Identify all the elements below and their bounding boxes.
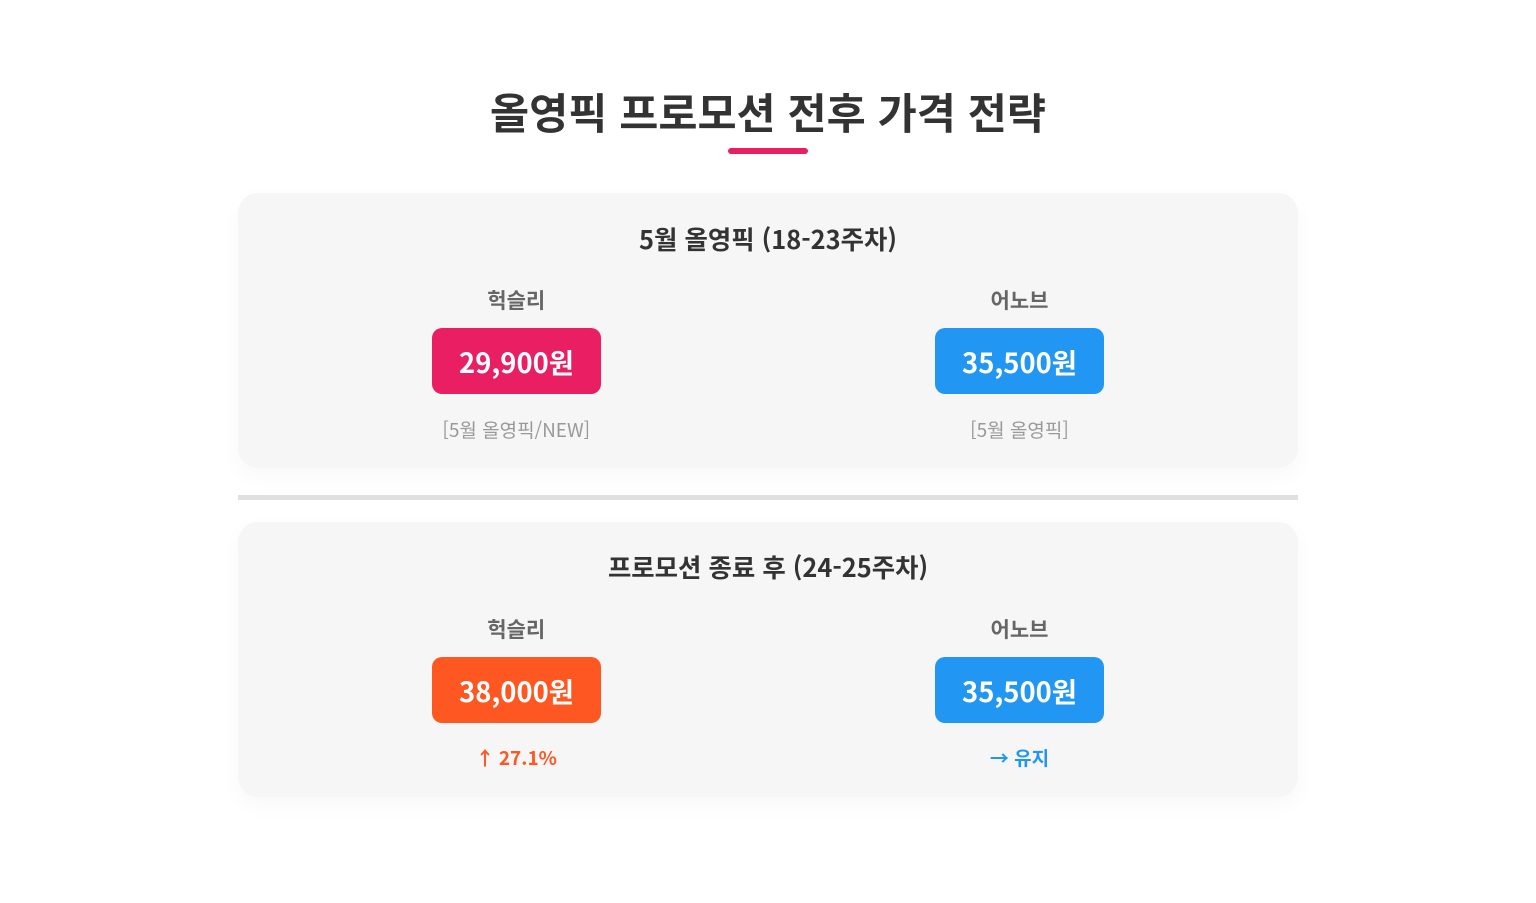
change: Huxley up: ↑ 27.1%	[476, 744, 557, 771]
price badge: Innobe: 35,500원	[962, 670, 1077, 710]
note: Huxley: [5월 올영픽/NEW]	[442, 416, 590, 443]
panel heading: 5월 올영픽 (18-23주차)	[639, 221, 897, 257]
price badge: Huxley	[432, 657, 601, 723]
change: Innobe maintained: → 유지	[990, 744, 1049, 771]
price badge: Innobe: 35,500원	[962, 341, 1077, 381]
label: Innobe: 어노브	[991, 614, 1048, 644]
title: 올영픽 프로모션 전후 가격 전략	[490, 81, 1046, 142]
panel heading: 프로모션 종료 후 (24-25주차)	[608, 549, 928, 585]
label: Huxley: 헉슬리	[487, 285, 545, 315]
panel: after promotion	[238, 522, 1298, 796]
price badge: Huxley: 29,900원	[459, 341, 574, 381]
label: Innobe: 어노브	[991, 285, 1048, 315]
price badge: Huxley	[432, 328, 601, 394]
price badge: Innobe	[935, 657, 1104, 723]
price badge: Huxley: 38,000원	[459, 670, 574, 710]
section divider	[238, 495, 1298, 500]
price badge: Innobe	[935, 328, 1104, 394]
label: Huxley: 헉슬리	[487, 614, 545, 644]
title underline	[728, 148, 808, 154]
note: Innobe: [5월 올영픽]	[970, 416, 1069, 443]
panel: May Olympick	[238, 193, 1298, 468]
